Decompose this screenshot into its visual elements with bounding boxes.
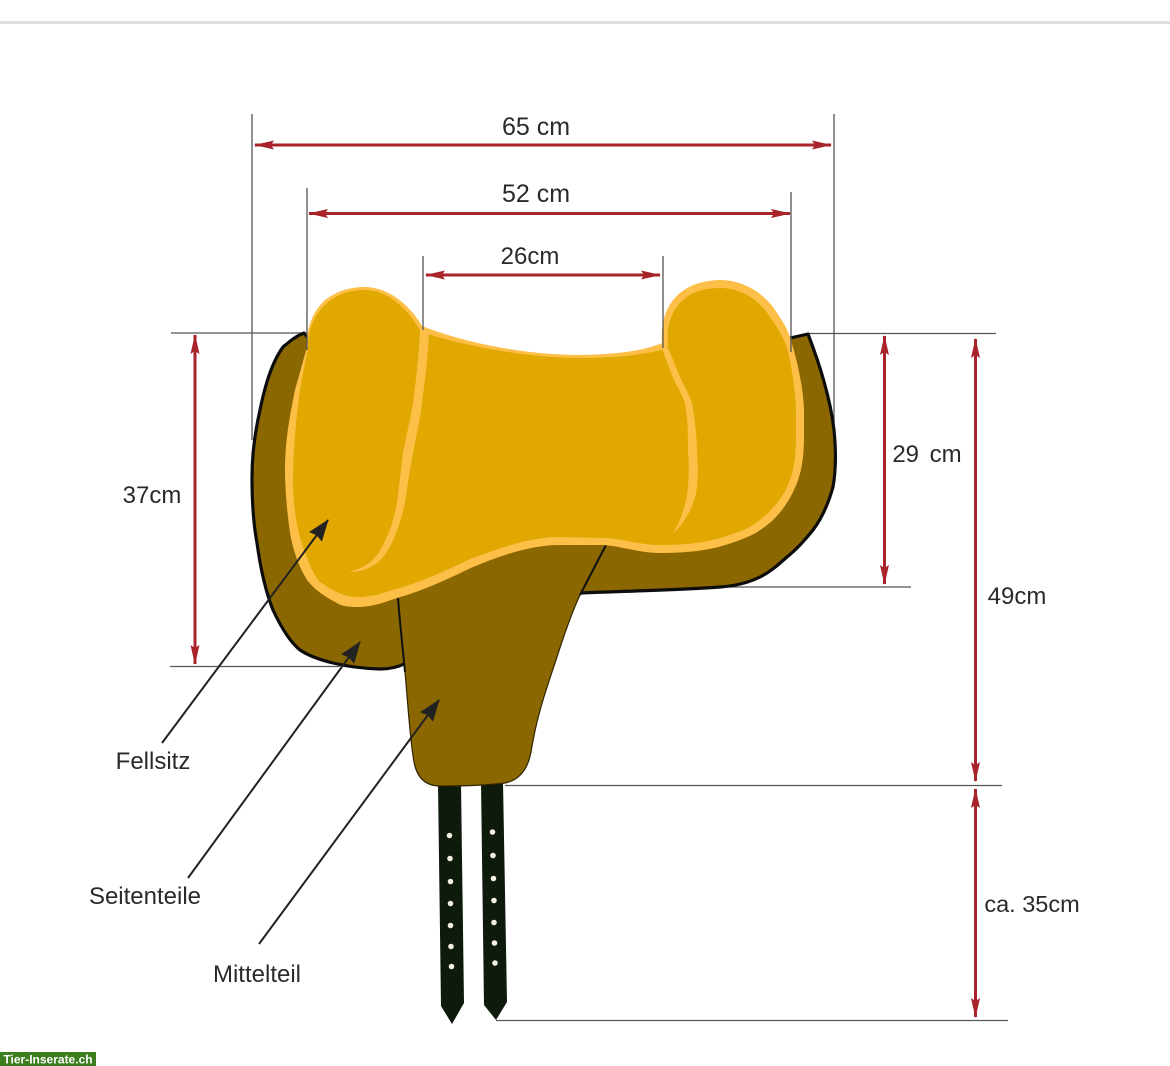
- dimension: ca. 35cm: ca. 35cm: [984, 891, 1080, 917]
- stirrup strap left: [438, 784, 464, 1024]
- fleece seam right: [661, 346, 698, 533]
- side panels: [252, 333, 835, 669]
- callout: Seitenteile: Seitenteile: [89, 883, 201, 910]
- fleece seat: [285, 280, 804, 607]
- dimension: 29 cm: 29 cm: [892, 441, 962, 468]
- dimension: 49cm: 49cm: [988, 583, 1046, 610]
- callout: Mittelteil: [213, 700, 439, 988]
- dimension: 26cm: 26cm: [501, 243, 559, 270]
- callout: Fellsitz: [116, 520, 328, 775]
- callout: Mittelteil: Mittelteil: [213, 961, 301, 988]
- centre panel: [398, 545, 606, 786]
- stirrup strap right: [481, 782, 507, 1020]
- callout: Fellsitz: Fellsitz: [116, 748, 190, 775]
- extension lines: [170, 114, 1008, 1020]
- saddle pad: [252, 188, 835, 1024]
- fleece seam left: [349, 330, 429, 572]
- dimension: 37cm: 37cm: [123, 482, 181, 509]
- dimension: 52 cm: 52 cm: [502, 180, 570, 208]
- callout: Seitenteile: [89, 642, 360, 910]
- dimension: 65 cm: 65 cm: [502, 113, 570, 141]
